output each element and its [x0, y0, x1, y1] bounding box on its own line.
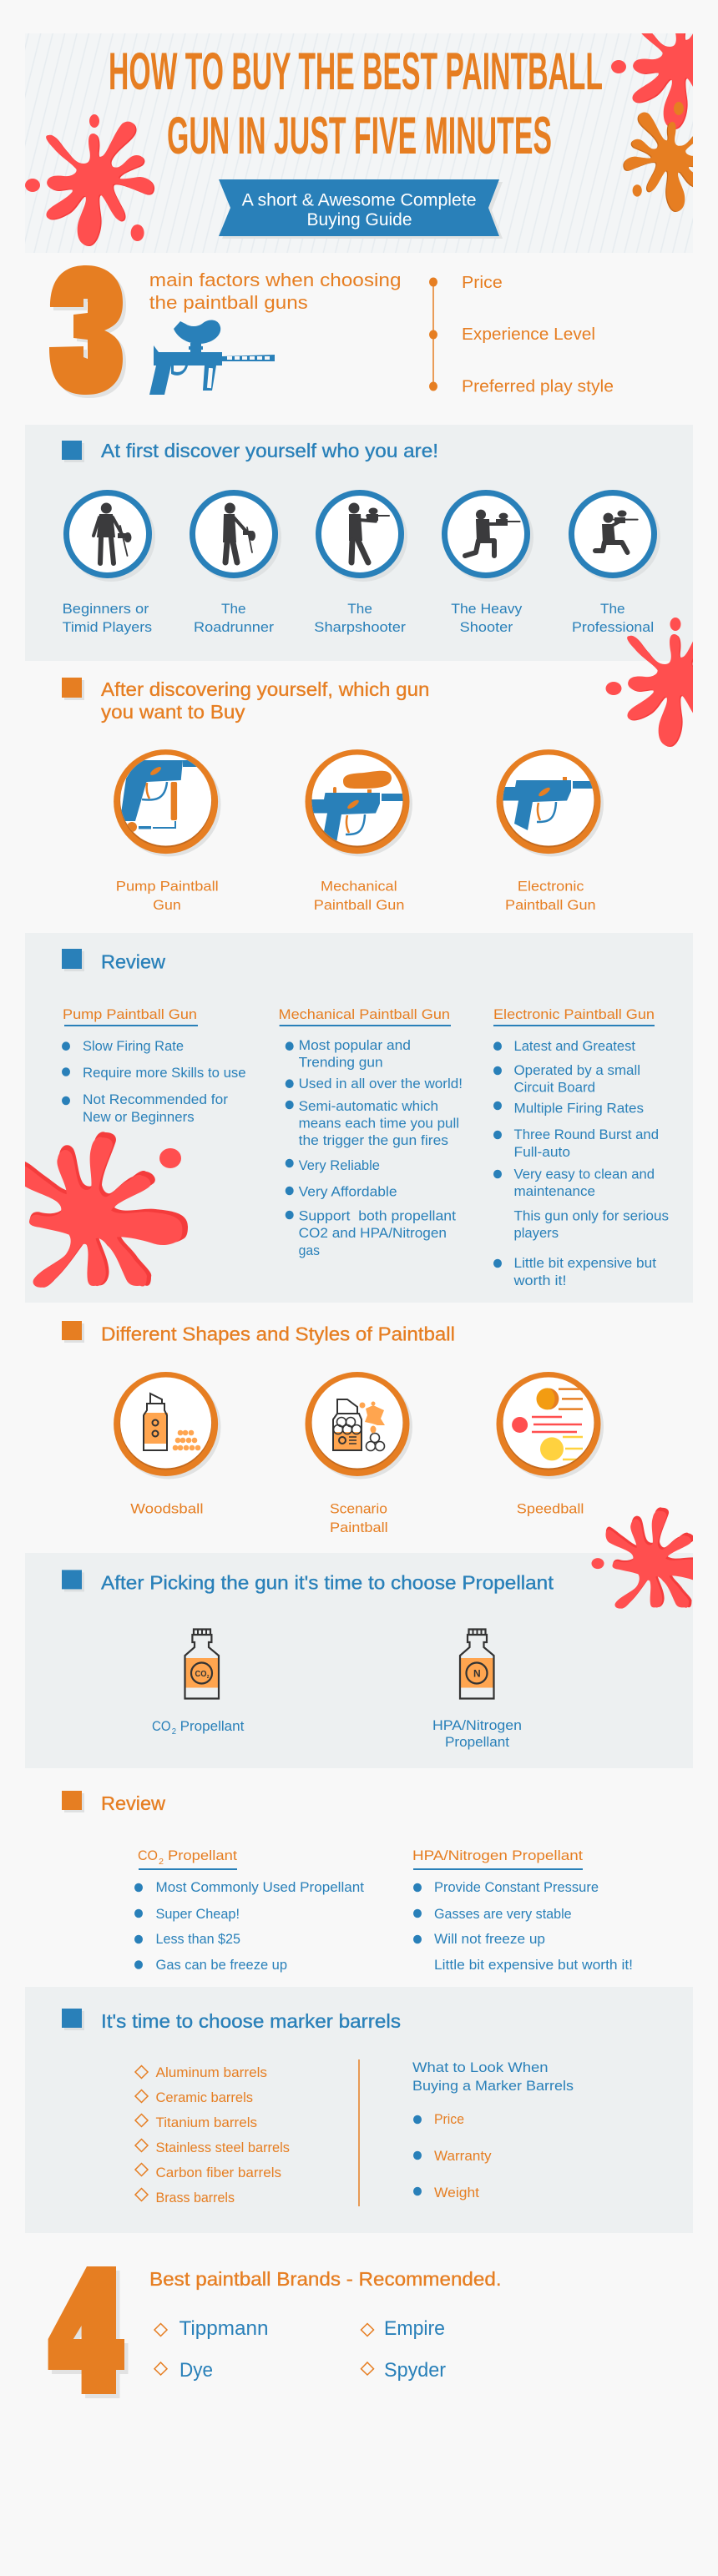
style: woodsball	[114, 1372, 220, 1517]
player: sharpshooter: Sharpshooter	[314, 619, 406, 635]
column: pump: Require more Skills to use	[83, 1065, 246, 1081]
heading: After discovering yourself, which gun	[101, 678, 429, 700]
bottle: CO2: CO	[152, 1718, 171, 1734]
what to look for	[412, 2059, 574, 2200]
column: HPA nitrogen: Provide Constant Pressure	[434, 1879, 599, 1895]
heading: Review	[101, 951, 165, 973]
brand list: Tippmann	[179, 2317, 269, 2340]
column: electronic: Very easy to clean and	[514, 1167, 655, 1182]
column: electronic: Latest and Greatest	[514, 1038, 635, 1054]
barrel list: Ceramic barrels	[155, 2090, 253, 2105]
brand list: Dye	[180, 2359, 213, 2382]
splat: left red	[25, 114, 154, 246]
brand list	[154, 2317, 446, 2382]
player: sharpshooter	[314, 492, 407, 635]
style: scenario: Scenario	[330, 1500, 387, 1517]
player: professional: Professional	[572, 619, 654, 635]
what to look for: Buying a Marker Barrels	[412, 2078, 574, 2094]
what to look for: What to Look When	[412, 2059, 549, 2075]
gun: mechanical	[306, 749, 412, 913]
column: mechanical: Semi-automatic which	[299, 1098, 438, 1114]
column: electronic: Operated by a small	[514, 1062, 640, 1078]
intro text	[149, 270, 402, 313]
player: beginners: Beginners or	[63, 601, 149, 617]
column: CO2: Super Cheap!	[155, 1906, 240, 1922]
column: HPA nitrogen: Gasses are very stable	[434, 1906, 572, 1922]
column: HPA nitrogen	[412, 1848, 633, 1973]
ribbon subtitle: Buying Guide	[307, 210, 412, 229]
splat: lower right red	[591, 1507, 693, 1609]
big number 4	[48, 2266, 129, 2398]
column: mechanical: Support both propellant	[299, 1208, 456, 1224]
player: professional: The	[600, 601, 625, 617]
gun: pump: Gun	[153, 897, 181, 913]
column: pump: Not Recommended for	[83, 1091, 228, 1107]
splat: right middle red	[606, 618, 693, 747]
player: roadrunner: The	[221, 601, 246, 617]
player: roadrunner: Roadrunner	[194, 619, 274, 635]
style: woodsball: Woodsball	[130, 1500, 204, 1517]
barrel list	[135, 2064, 290, 2205]
barrel list: Stainless steel barrels	[155, 2140, 290, 2155]
column: mechanical: Most popular and	[299, 1037, 411, 1053]
gun: electronic	[496, 749, 604, 913]
intro text: the paintball guns	[149, 292, 308, 313]
title	[109, 43, 603, 165]
column: electronic: players	[514, 1225, 559, 1241]
bottle: CO2	[152, 1629, 245, 1737]
heading: At first discover yourself who you are!	[101, 440, 438, 461]
icon: paintball gun	[149, 320, 275, 395]
splat: big left red	[19, 1132, 188, 1288]
column: electronic: Full-auto	[514, 1144, 570, 1160]
column: electronic: Electronic Paintball Gun	[493, 1006, 655, 1022]
heading	[62, 1791, 165, 1814]
panel: gun review	[19, 933, 693, 1303]
big number 3	[49, 265, 126, 398]
heading: Different Shapes and Styles of Paintball	[101, 1323, 455, 1344]
column: electronic	[493, 1006, 669, 1288]
column: mechanical: the trigger the gun fires	[299, 1132, 448, 1148]
heading	[62, 678, 429, 723]
panel: marker barrels	[25, 1987, 693, 2233]
column: mechanical	[279, 1006, 463, 1258]
what to look for: Warranty	[434, 2148, 492, 2164]
column: mechanical: gas	[299, 1243, 320, 1258]
column: electronic: Circuit Board	[514, 1080, 595, 1096]
column: mechanical: CO2 and HPA/Nitrogen	[299, 1225, 447, 1241]
column: HPA nitrogen: Will not freeze up	[434, 1931, 545, 1947]
gun: electronic: Electronic	[518, 878, 584, 895]
player: beginners	[63, 492, 155, 635]
column: electronic: This gun only for serious	[514, 1208, 669, 1224]
timeline list: Experience Level	[462, 325, 595, 344]
barrel list: Titanium barrels	[155, 2115, 257, 2130]
what to look for: Price	[434, 2111, 464, 2127]
style: speedball: Speedball	[517, 1500, 584, 1517]
heading: It's time to choose marker barrels	[101, 2010, 401, 2032]
column: mechanical: Very Affordable	[299, 1184, 397, 1200]
bottle: nitrogen: Propellant	[445, 1734, 509, 1750]
column: CO2: Gas can be freeze up	[155, 1957, 287, 1973]
section: best brands	[48, 2266, 502, 2398]
barrel list: Aluminum barrels	[155, 2064, 267, 2080]
column: mechanical: Mechanical Paintball Gun	[279, 1006, 450, 1022]
bottle: CO2: 2	[207, 1675, 210, 1680]
section: shapes and styles	[62, 1321, 604, 1535]
timeline list	[429, 274, 614, 396]
player: heavy shooter: The Heavy	[451, 601, 523, 617]
column: electronic: Three Round Burst and	[514, 1127, 659, 1142]
column: electronic: Little bit expensive but	[514, 1255, 656, 1271]
header panel	[25, 33, 693, 253]
column: mechanical: means each time you pull	[299, 1116, 459, 1132]
column: mechanical: Very Reliable	[299, 1157, 380, 1173]
gun: pump	[114, 749, 220, 913]
timeline list: Price	[462, 274, 503, 292]
player: beginners: Timid Players	[63, 619, 152, 635]
section: propellant review	[62, 1791, 633, 1973]
player: professional	[571, 492, 660, 635]
column: pump	[62, 1006, 246, 1125]
heading: Best paintball Brands - Recommended.	[149, 2268, 502, 2290]
bottle: CO2: CO	[195, 1670, 207, 1679]
ribbon subtitle	[219, 179, 503, 239]
bottle: CO2: Propellant	[180, 1718, 245, 1734]
gun: electronic: Paintball Gun	[505, 897, 596, 913]
ribbon subtitle: A short & Awesome Complete	[242, 191, 477, 210]
heading: you want to Buy	[101, 701, 245, 723]
column: CO2: Propellant	[168, 1848, 237, 1863]
heading: Review	[101, 1792, 165, 1814]
gun: mechanical: Paintball Gun	[314, 897, 404, 913]
gun: pump: Pump Paintball	[116, 878, 219, 895]
style: speedball	[496, 1372, 604, 1517]
bottle: nitrogen: N	[473, 1667, 481, 1679]
barrel list: Carbon fiber barrels	[155, 2165, 281, 2180]
style: scenario	[306, 1372, 412, 1535]
column: pump: Slow Firing Rate	[83, 1038, 184, 1054]
barrel list: Brass barrels	[155, 2190, 235, 2205]
column: CO2: CO	[138, 1848, 158, 1863]
player: roadrunner	[192, 492, 281, 635]
column: electronic: maintenance	[514, 1183, 595, 1199]
what to look for: Weight	[434, 2185, 479, 2200]
column: electronic: worth it!	[513, 1273, 566, 1288]
brand list: Empire	[384, 2317, 445, 2340]
column: mechanical: Trending gun	[299, 1055, 383, 1071]
player: heavy shooter: Shooter	[460, 619, 513, 635]
column: HPA nitrogen: Little bit expensive but worth it!	[434, 1957, 633, 1973]
column: HPA nitrogen: HPA/Nitrogen Propellant	[412, 1848, 583, 1863]
heading: After Picking the gun it's time to choose Propellant	[101, 1572, 554, 1594]
column: pump: New or Beginners	[83, 1109, 195, 1125]
bottle: nitrogen: HPA/Nitrogen	[432, 1717, 522, 1733]
style: scenario: Paintball	[330, 1520, 388, 1535]
gun: mechanical: Mechanical	[321, 878, 397, 895]
splat: right orange	[623, 112, 693, 212]
brand list: Spyder	[384, 2359, 446, 2382]
splat: top right red	[611, 33, 693, 129]
bottle: nitrogen	[432, 1629, 522, 1750]
column: CO2: Less than $25	[155, 1931, 240, 1947]
heading	[62, 949, 165, 973]
column: CO2: Most Commonly Used Propellant	[155, 1879, 364, 1895]
section: which gun	[62, 678, 604, 913]
column: pump: Pump Paintball Gun	[63, 1006, 197, 1022]
column: mechanical: Used in all over the world!	[299, 1076, 463, 1091]
bottle: CO2: 2	[172, 1727, 176, 1737]
section: three main factors	[49, 265, 614, 398]
timeline list: Preferred play style	[462, 377, 614, 396]
player: heavy shooter	[444, 492, 533, 635]
intro text: main factors when choosing	[149, 270, 402, 290]
panel: discover yourself	[25, 425, 693, 661]
player: sharpshooter: The	[347, 601, 372, 617]
column: electronic: Multiple Firing Rates	[514, 1101, 644, 1117]
column: CO2	[134, 1848, 364, 1973]
column: CO2: 2	[159, 1858, 164, 1867]
panel: choose propellant	[25, 1507, 715, 1768]
